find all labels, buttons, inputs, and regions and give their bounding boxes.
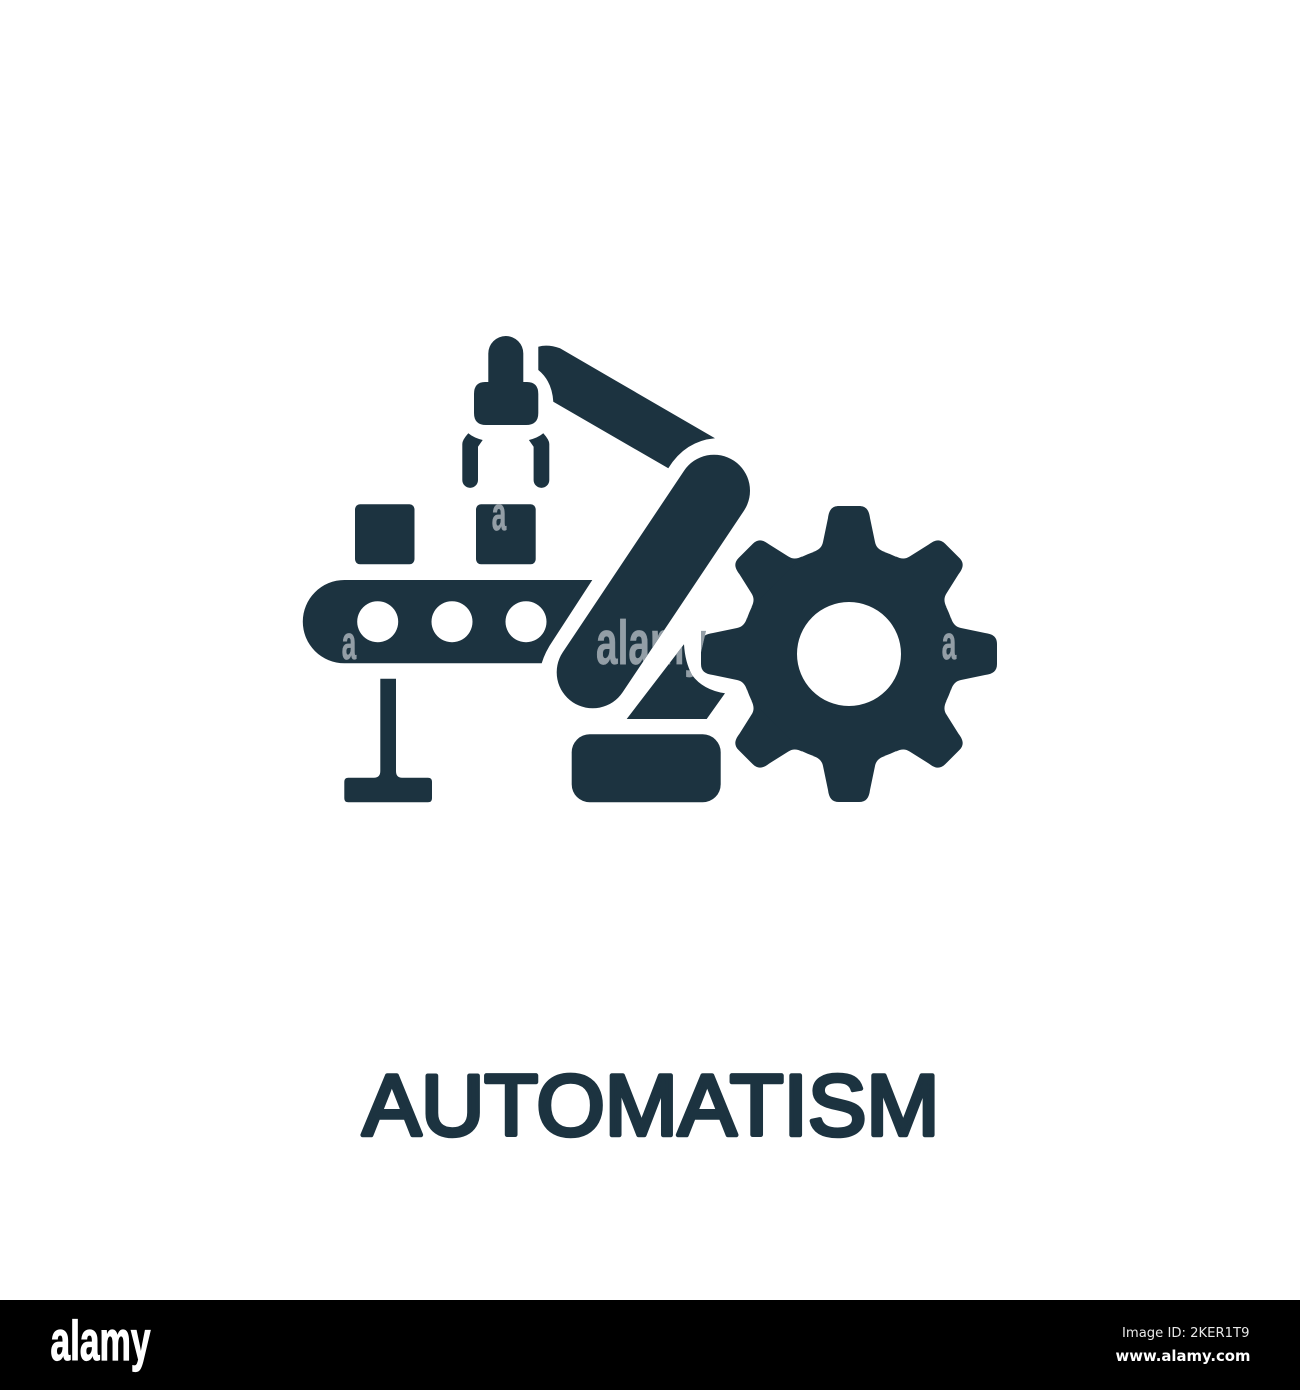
icon: boxes — [355, 504, 536, 564]
footer image id: Image ID: 2KER1T9 — [1122, 1325, 1250, 1341]
icon: main robot arm — [593, 491, 714, 672]
title: AUTOMATISM — [362, 1058, 940, 1154]
footer bar — [0, 1300, 1300, 1390]
watermark overlays: a — [942, 616, 957, 669]
watermark overlays: a — [492, 487, 507, 540]
watermark overlays: alamy — [596, 609, 706, 678]
footer logo: alamy — [50, 1309, 150, 1372]
infographic canvas — [0, 336, 1300, 1390]
watermark overlays: a — [342, 616, 357, 669]
icon: conveyor stand — [344, 679, 432, 802]
icon: gripper claws — [462, 433, 549, 488]
footer url: www.alamy.com — [1116, 1347, 1250, 1365]
icon: upper robot arm — [538, 346, 715, 468]
icon: conveyor belt — [303, 580, 592, 663]
icon: gear — [701, 506, 997, 802]
icon: gripper head — [474, 336, 538, 425]
icon: automation robot arm, conveyor and gear — [303, 336, 997, 802]
icon: robot base — [572, 734, 721, 802]
icon: robot arm lower joint — [627, 644, 725, 719]
watermark overlays — [342, 487, 957, 678]
